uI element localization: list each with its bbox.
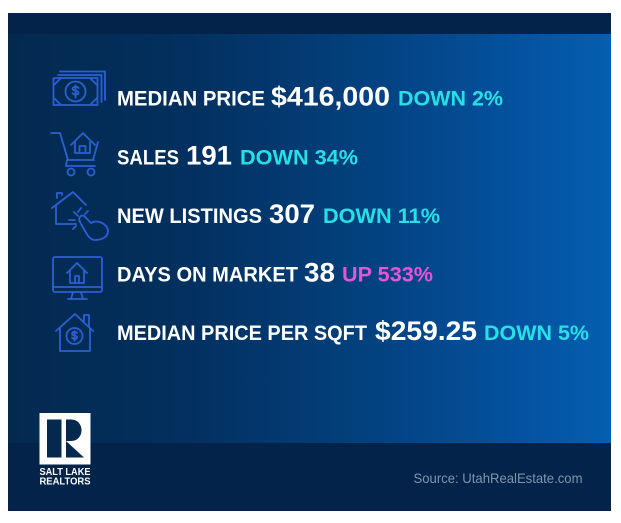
icon: house with pointing hand [52, 192, 108, 240]
icon: money stack [54, 72, 105, 105]
icon: house with dollar [56, 314, 93, 351]
icon: shopping cart with house [51, 133, 98, 176]
row 1: median price: $416,000 [271, 82, 390, 112]
row 3: new listings: 307 [269, 199, 315, 229]
row 1: median price: DOWN 2% [398, 88, 503, 110]
row 2: sales: DOWN 34% [240, 146, 358, 170]
row 1: median price: MEDIAN PRICE [117, 88, 265, 110]
row 5: median price per sqft: $259.25 [375, 316, 477, 346]
row 1: median price [117, 82, 503, 112]
row 3: new listings [117, 199, 440, 229]
logo: Salt Lake Realtors [40, 413, 90, 488]
logo: Salt Lake Realtors: SALT LAKE [40, 466, 90, 478]
row 3: new listings: NEW LISTINGS [117, 205, 262, 228]
icon: monitor with house [53, 257, 102, 299]
row 2: sales: 191 [186, 140, 232, 170]
row 4: days on market: 38 [304, 258, 335, 288]
row 5: median price per sqft: MEDIAN PRICE PER SQFT [117, 322, 367, 345]
row 4: days on market [117, 258, 433, 288]
row 4: days on market: UP 533% [342, 264, 433, 286]
row 3: new listings: DOWN 11% [323, 205, 440, 228]
source note: Source: UtahRealEstate.com [414, 470, 582, 486]
logo: Salt Lake Realtors: REALTORS [40, 476, 90, 488]
bottom band [8, 443, 611, 511]
row 4: days on market: DAYS ON MARKET [117, 264, 298, 286]
row 5: median price per sqft: DOWN 5% [484, 322, 589, 345]
row 5: median price per sqft [117, 316, 589, 346]
row 2: sales [117, 140, 358, 170]
top band [8, 13, 611, 34]
row 2: sales: SALES [117, 146, 179, 170]
